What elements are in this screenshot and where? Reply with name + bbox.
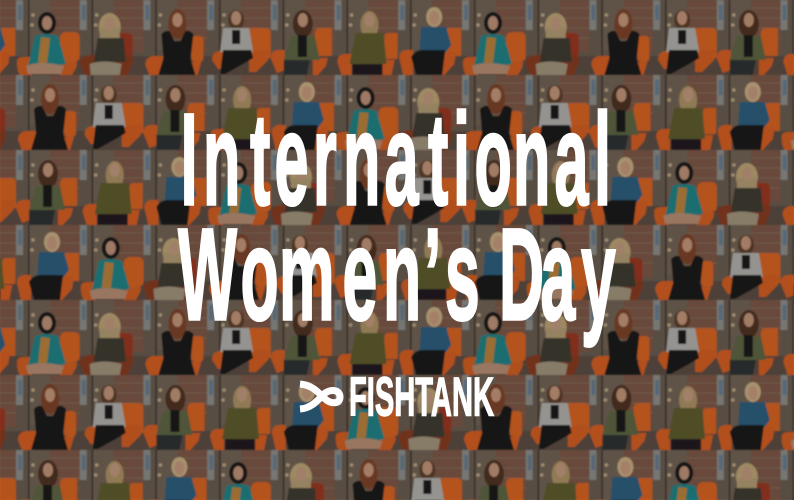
title: International Women's Day: International <box>181 85 611 233</box>
icon: fish <box>300 384 340 409</box>
logo: Fishtank <box>300 366 494 428</box>
title: International Women's Day <box>178 85 616 348</box>
logo wordmark: FISHTANK <box>349 366 494 428</box>
title: International Women's Day: Women’s Day <box>178 201 616 348</box>
